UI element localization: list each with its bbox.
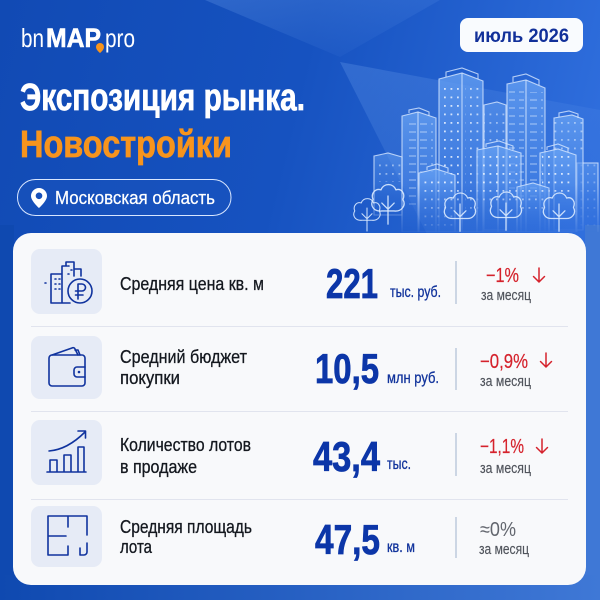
title: Новостройки xyxy=(20,124,232,166)
logo: bnMAP.pro xyxy=(21,23,135,53)
change: −1,1% xyxy=(480,436,524,458)
value: 43,4 xyxy=(313,433,381,480)
row 3: lots on sale: в продаже xyxy=(120,456,197,477)
back buildings xyxy=(577,163,598,233)
arrow down xyxy=(536,439,548,453)
title xyxy=(20,77,305,166)
change: −0,9% xyxy=(480,351,528,373)
trees xyxy=(354,199,380,231)
label: Средний бюджет xyxy=(120,346,247,367)
main card xyxy=(13,233,586,585)
icon: location pin xyxy=(31,188,47,208)
front buildings xyxy=(419,169,455,232)
logo: bnMAP.pro: MAP xyxy=(46,23,101,53)
change: −1% xyxy=(486,265,519,287)
small left tower xyxy=(374,153,402,215)
icon: wallet xyxy=(31,336,102,399)
icon: floor plan xyxy=(31,506,102,567)
unit: тыс. руб. xyxy=(390,284,441,301)
logo: bnMAP.pro: bn xyxy=(21,23,44,53)
tall tower left xyxy=(439,73,483,232)
period: за месяц xyxy=(480,374,531,390)
label: Средняя цена кв. м xyxy=(120,273,264,294)
city illustration xyxy=(354,68,598,233)
second-left tower xyxy=(402,112,436,232)
logo: bnMAP.pro: pro xyxy=(105,23,135,53)
row 2: average budget xyxy=(31,336,552,399)
row 2: average budget: покупки xyxy=(120,367,180,388)
arrow down xyxy=(540,353,552,367)
period: за месяц xyxy=(480,461,531,477)
row 3: lots on sale xyxy=(31,420,548,485)
date badge: июль 2026 xyxy=(474,26,569,47)
tall tower right xyxy=(507,80,545,232)
period: за месяц xyxy=(479,542,529,558)
change: ≈0% xyxy=(480,519,516,541)
label: Количество лотов xyxy=(120,434,251,455)
period: за месяц xyxy=(481,288,531,304)
unit: млн руб. xyxy=(387,370,439,387)
value: 47,5 xyxy=(315,516,380,563)
date badge xyxy=(460,18,583,52)
arrow down xyxy=(534,268,544,282)
region pill: Московская область xyxy=(55,188,215,208)
unit: кв. м xyxy=(387,539,415,556)
label: Средняя площадь xyxy=(120,516,252,537)
icon: growth chart xyxy=(31,420,102,485)
value: 221 xyxy=(326,260,378,307)
unit: тыс. xyxy=(387,456,411,473)
icon: buildings with rouble xyxy=(31,249,102,314)
title: Экспозиция рынка. xyxy=(20,77,305,119)
row 4: average lot area xyxy=(31,506,529,567)
row 4: average lot area: лота xyxy=(120,536,153,557)
region pill xyxy=(18,180,231,216)
value: 10,5 xyxy=(315,345,379,392)
row 1: average price per sq m xyxy=(31,249,544,314)
